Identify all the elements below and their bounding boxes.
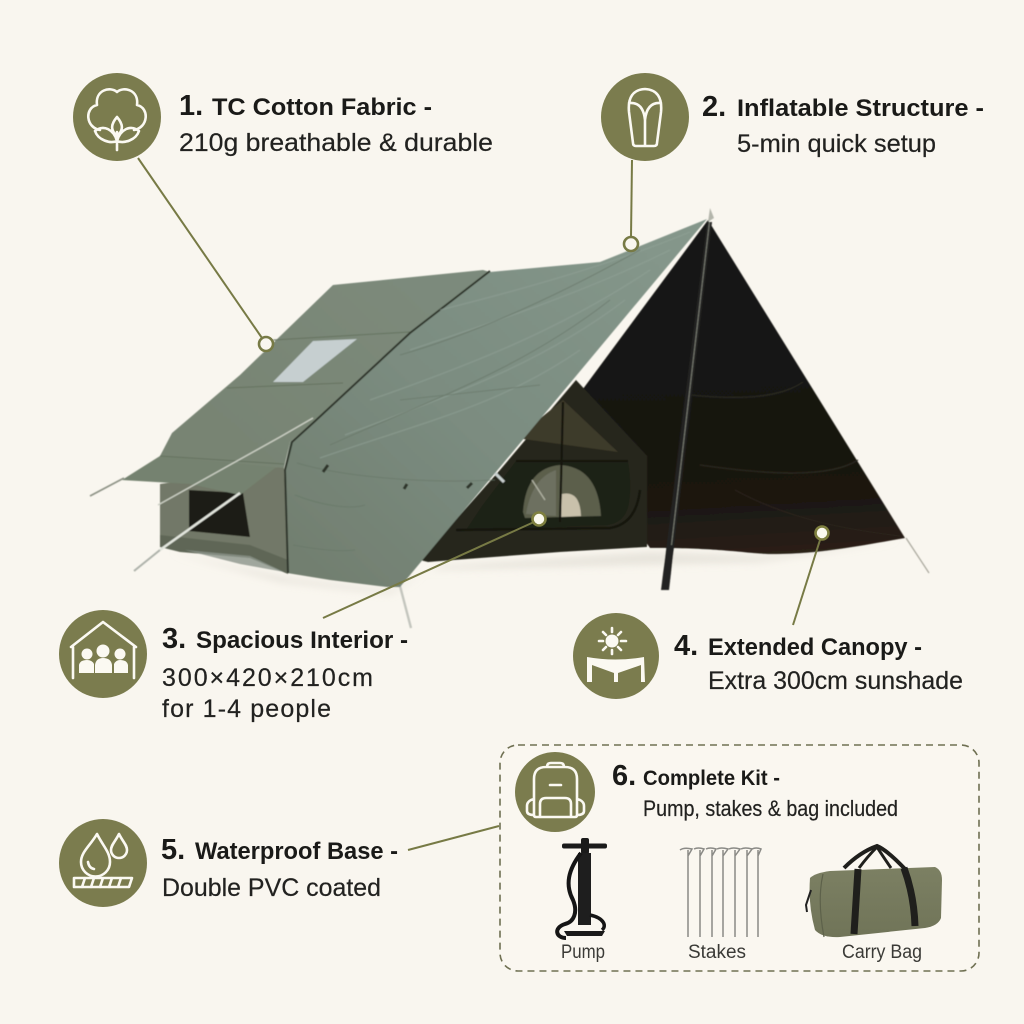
tent illustration <box>90 208 929 628</box>
canopy pole <box>661 222 712 590</box>
pump label: Pump <box>561 942 605 963</box>
description 4: Extra 300cm sunshade <box>708 667 963 695</box>
roof skylight <box>273 339 357 382</box>
pump <box>557 838 607 938</box>
icon: inflatable tube <box>601 73 689 161</box>
callout 1: TC cotton fabric <box>73 73 493 351</box>
far guy line and stakes <box>400 538 929 628</box>
carry bag label: Carry Bag <box>842 942 922 963</box>
roof toggles <box>323 465 472 489</box>
front guy lines <box>90 418 313 571</box>
main roof slope <box>285 219 707 587</box>
interior window <box>456 400 640 530</box>
heading 1: 1. <box>179 90 203 122</box>
icon: backpack <box>515 752 595 832</box>
callout 2: inflatable structure: Inflatable Structure - <box>737 95 984 122</box>
leader line 2 <box>631 160 632 237</box>
front window <box>189 490 250 537</box>
tent back wall and interior <box>420 380 647 562</box>
callout 3: spacious interior: Spacious Interior - <box>196 627 408 654</box>
front wall <box>160 466 288 574</box>
dashed panel frame <box>500 745 979 971</box>
callout 5: waterproof base: Waterproof Base - <box>195 838 398 865</box>
description 5: Double PVC coated <box>162 874 381 902</box>
anchor ring 2 <box>624 237 638 251</box>
anchor ring 1 <box>259 337 273 351</box>
roof folds <box>320 232 690 458</box>
seam between panels <box>285 271 490 573</box>
leader line 5 <box>408 826 499 850</box>
description 6: Pump, stakes & bag included <box>643 796 898 821</box>
panel: complete kit: Complete Kit - <box>643 767 780 790</box>
callout 4: extended canopy <box>573 526 963 699</box>
description 2: 5-min quick setup <box>737 130 936 158</box>
callout 3: spacious interior <box>59 512 546 723</box>
canopy seams <box>690 382 900 536</box>
icon: cotton <box>73 73 161 161</box>
callout 4: extended canopy: Extended Canopy - <box>708 634 922 661</box>
anchor ring 3 <box>532 512 546 526</box>
heading 6: 6. <box>612 760 636 792</box>
panel: complete kit <box>500 745 979 971</box>
callout 2: inflatable structure <box>601 73 984 251</box>
anchor ring 4 <box>816 526 828 540</box>
icon: water drops on base <box>59 819 147 907</box>
stakes label: Stakes <box>688 942 746 963</box>
dark canopy underside <box>560 220 905 554</box>
front awning <box>122 456 283 495</box>
callout 1: TC cotton fabric: TC Cotton Fabric - <box>212 94 432 121</box>
leader line 3 <box>323 522 534 618</box>
stakes <box>680 848 761 937</box>
roof panel seams <box>160 332 410 464</box>
top roof panel <box>160 270 490 468</box>
roof guy loop <box>495 473 504 482</box>
ground shadow <box>170 540 900 594</box>
leader line 1 <box>138 158 262 338</box>
carry bag <box>806 846 942 937</box>
icon: sun and canopy <box>573 613 659 699</box>
description 1: 210g breathable & durable <box>179 129 493 157</box>
description 3: 300×420×210cm <box>162 664 373 692</box>
heading 3: 3. <box>162 623 186 655</box>
heading 5: 5. <box>161 834 185 866</box>
heading 4: 4. <box>674 630 698 662</box>
icon: people in house <box>59 610 147 698</box>
leader line 4 <box>793 540 820 625</box>
callout 5: waterproof base <box>59 819 499 907</box>
heading 2: 2. <box>702 91 726 123</box>
callout 3: spacious interior: for 1-4 people <box>162 695 331 723</box>
